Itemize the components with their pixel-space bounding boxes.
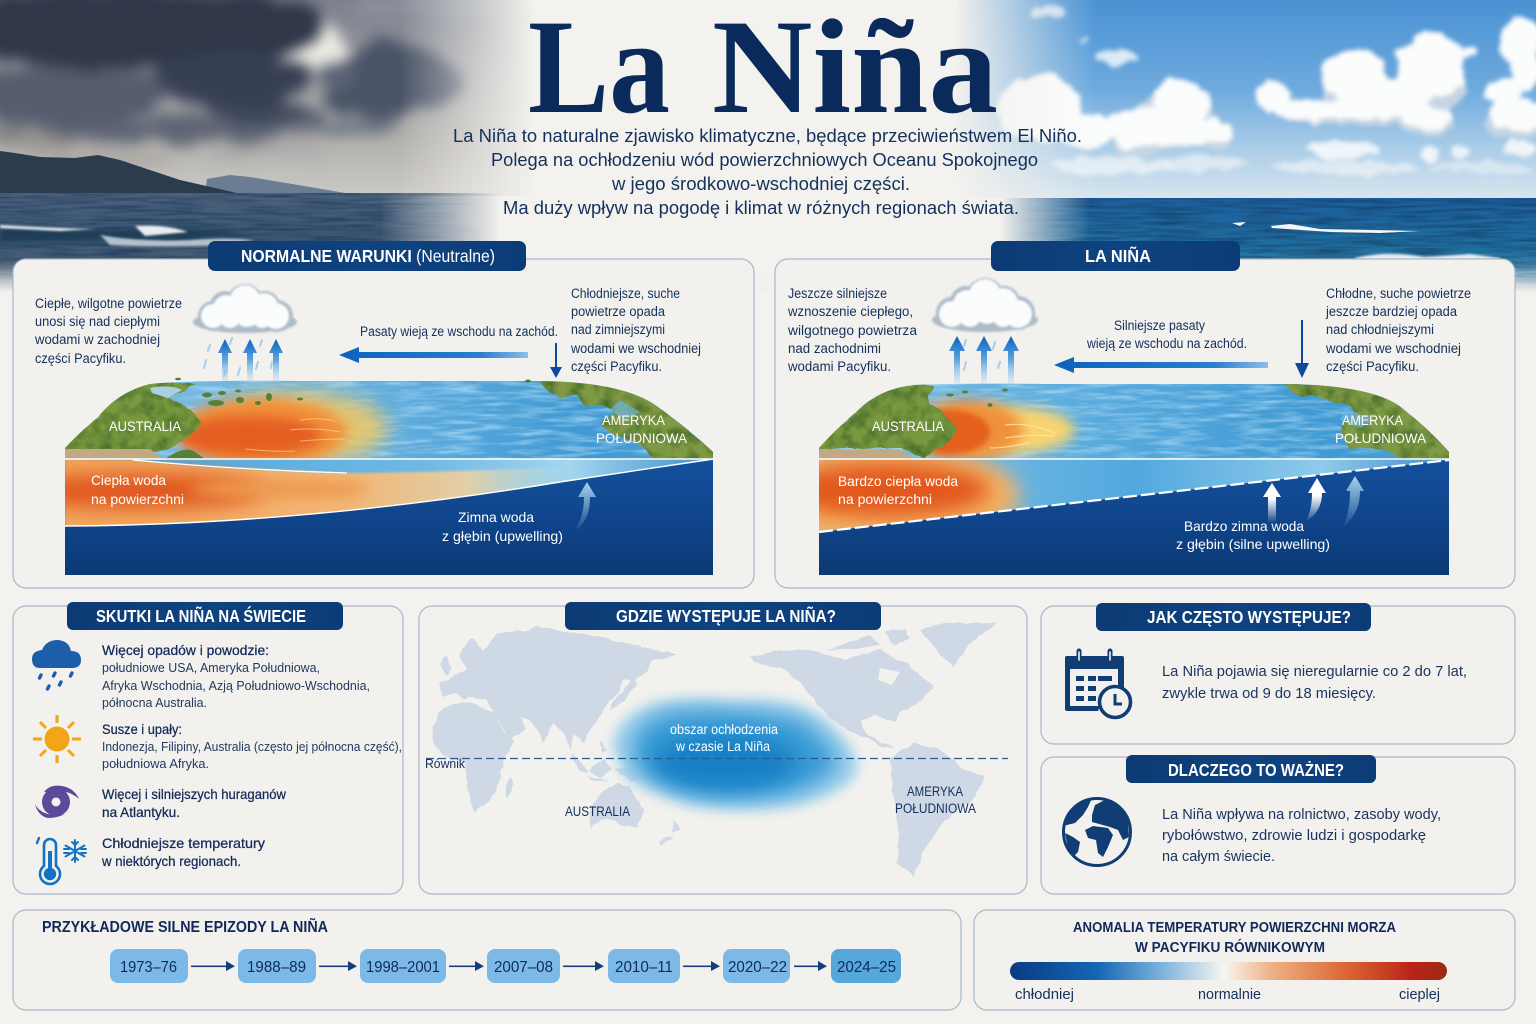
hero background: sea on the left [0, 193, 495, 290]
panel: sea surface temperature anomaly legend [974, 910, 1515, 1010]
text: hurricanes: na Atlantyku. [102, 804, 180, 820]
arrow: sinking air [1295, 320, 1309, 378]
heading: effects [67, 602, 343, 630]
label: equator: Równik [425, 756, 465, 771]
episode 2007-08 [487, 949, 560, 983]
episode 2024-25 [831, 949, 901, 983]
text: cool sinking air [1325, 286, 1471, 374]
icon: cloud with rain [932, 278, 1038, 370]
icon: thermometer and snowflake [37, 838, 86, 884]
text: rain and floods: południowe USA, Ameryka Południowa, [102, 661, 320, 675]
scale labels [1015, 987, 1440, 1003]
label: South America [596, 412, 688, 446]
episode 1973-76 [110, 949, 188, 983]
text: warm rising air [34, 296, 182, 366]
text: how often: La Niña pojawia się nieregularnie co 2 do 7 lat, [1162, 663, 1467, 680]
label: South America: POŁUDNIOWA [1335, 430, 1427, 446]
scale labels: normalnie [1198, 987, 1261, 1003]
arrow: trade winds [339, 347, 528, 363]
episode 1988-89: 1988–89 [247, 959, 306, 976]
text: how often: zwykle trwa od 9 do 18 miesięcy. [1162, 685, 1376, 702]
label: South America: AMERYKA [1342, 412, 1404, 428]
label: Australia: AUSTRALIA [872, 418, 945, 434]
arrow [563, 961, 604, 971]
label: very cold deep water [1176, 518, 1330, 552]
episode 2010-11 [608, 949, 680, 983]
intro text: w jego środkowo-wschodniej części. [611, 173, 910, 194]
hero background: stormy sky on the left [0, 0, 550, 196]
icon: globe [1063, 798, 1130, 866]
text: stronger rising air: wilgotnego powietrza [787, 323, 917, 338]
cooling area [612, 699, 858, 810]
label: Australia: AUSTRALIA [565, 804, 630, 819]
text: warm rising air: unosi się nad ciepłymi [35, 314, 160, 329]
heading: La Niña: LA NIÑA [1085, 245, 1151, 266]
label: warm surface water: na powierzchni [91, 491, 184, 507]
icon: hurricane [35, 786, 79, 818]
land: South America [1284, 384, 1452, 459]
panel: example episodes timeline [13, 910, 961, 1010]
stray islands along the horizon [175, 378, 531, 382]
panel: normal conditions [13, 241, 754, 588]
panel: La Niña conditions [750, 241, 1515, 588]
heading: normal conditions [208, 241, 526, 271]
heading: where [565, 602, 881, 630]
legend heading [1073, 920, 1396, 956]
intro text [453, 125, 1082, 218]
colour scale [1010, 962, 1447, 980]
label: warm surface water: Ciepła woda [91, 472, 166, 488]
text: cool sinking air: części Pacyfiku. [1326, 359, 1419, 374]
arrow [191, 961, 235, 971]
label: cold deep water: Zimna woda [458, 509, 534, 525]
panel: why it matters [1041, 755, 1515, 894]
text: cooler temperatures [101, 835, 265, 869]
icon: sun [33, 715, 81, 763]
heading: why it matters [1126, 755, 1376, 783]
heading: normal conditions: NORMALNE WARUNKI (Neutralne) [241, 246, 495, 266]
heading: why it matters: DLACZEGO TO WAŻNE? [1168, 760, 1344, 780]
episode 2020-22: 2020–22 [728, 959, 787, 976]
label: South America: POŁUDNIOWA [596, 430, 688, 446]
text: stronger rising air [787, 286, 917, 374]
episode 1998-2001 [360, 949, 446, 983]
label: warm surface water [91, 472, 184, 507]
label: very cold deep water: z głębin (silne upwelling) [1176, 536, 1330, 552]
text: warm rising air: wodami w zachodniej [34, 332, 160, 347]
title [528, 0, 998, 142]
icon: calendar with clock [1065, 651, 1130, 718]
text: cool sinking air: wodami we wschodniej [1325, 341, 1461, 356]
text: stronger trade winds [1086, 318, 1247, 351]
heading: where: GDZIE WYSTĘPUJE LA NIÑA? [616, 605, 836, 626]
hero background: blue sky on the right [940, 0, 1536, 198]
text: stronger rising air: Jeszcze silniejsze [788, 286, 887, 301]
text: why it matters: rybołówstwo, zdrowie ludzi i gospodarkę [1162, 827, 1426, 844]
label: very warm surface water [838, 473, 958, 507]
text: stronger trade winds: Silniejsze pasaty [1114, 318, 1205, 333]
text: warm rising air: Ciepłe, wilgotne powietrze [35, 296, 182, 311]
label: cooling area [670, 722, 778, 754]
icon: cloud with rain [193, 284, 297, 376]
panel: effects worldwide [13, 602, 403, 894]
label: South America: AMERYKA [907, 784, 963, 799]
text: droughts and heat: południowa Afryka. [102, 757, 209, 771]
heading: La Niña [991, 241, 1240, 271]
episode 1973-76: 1973–76 [120, 959, 177, 976]
heading: episodes: PRZYKŁADOWE SILNE EPIZODY LA NIÑA [42, 916, 328, 936]
text: cool sinking air: Chłodniejsze, suche [571, 286, 680, 301]
episode 2010-11: 2010–11 [615, 959, 673, 976]
panel: how often [1041, 603, 1515, 744]
text: stronger rising air: nad zachodnimi [788, 341, 881, 356]
text: warm rising air: części Pacyfiku. [35, 351, 126, 366]
scale labels: cieplej [1399, 987, 1440, 1003]
episode 2020-22 [723, 949, 790, 983]
hero background: fade to paper [0, 262, 1536, 292]
hero background: mountains [0, 151, 345, 193]
episode 2007-08: 2007–08 [494, 959, 553, 976]
text: rain and floods [102, 642, 370, 710]
text: stronger rising air: wznoszenie ciepłego, [787, 304, 913, 319]
text: how often [1162, 663, 1467, 702]
label: Australia: AUSTRALIA [109, 418, 182, 434]
icon: rain cloud [32, 640, 81, 689]
land: South America [538, 381, 716, 459]
arrow: sinking air [550, 343, 562, 378]
diagram: ocean surface map [60, 378, 716, 466]
arrow [794, 961, 827, 971]
diagram: ocean cross-section [819, 458, 1449, 575]
heading: how often: JAK CZĘSTO WYSTĘPUJE? [1147, 607, 1351, 627]
diagram: ocean surface map [815, 380, 1452, 460]
arrow: upwelling [574, 482, 596, 531]
text: cool sinking air: nad zimniejszymi [571, 322, 665, 337]
text: droughts and heat: Susze i upały: [102, 721, 182, 737]
text: cooler temperatures: Chłodniejsze temperatury [102, 835, 265, 851]
arrows: strong upwelling [1263, 476, 1364, 527]
label: South America: POŁUDNIOWA [895, 801, 976, 816]
text: why it matters: La Niña wpływa na rolnictwo, zasoby wody, [1162, 806, 1441, 823]
arrow [683, 961, 720, 971]
text: droughts and heat [102, 721, 402, 771]
arrows: rising air [218, 339, 283, 385]
intro text: La Niña to naturalne zjawisko klimatyczne, będące przeciwieństwem El Niño. [453, 125, 1082, 146]
text: cool sinking air: powietrze opada [571, 304, 665, 319]
text: cool sinking air: Chłodne, suche powietrze [1326, 286, 1471, 301]
legend heading: W PACYFIKU RÓWNIKOWYM [1135, 938, 1325, 956]
text: hurricanes [102, 786, 287, 820]
diagram: ocean cross-section [15, 459, 713, 575]
text: why it matters [1162, 806, 1441, 865]
text: cool sinking air: części Pacyfiku. [571, 359, 662, 374]
label: South America [1335, 412, 1427, 446]
text: cool sinking air: wodami we wschodniej [570, 341, 701, 356]
heading: how often [1096, 603, 1371, 631]
scale labels: chłodniej [1015, 987, 1074, 1003]
text: cool sinking air: jeszcze bardziej opada [1325, 304, 1457, 319]
text: cool sinking air: nad chłodniejszymi [1326, 322, 1434, 337]
label: cold deep water [442, 509, 563, 544]
heading: effects: SKUTKI LA NIÑA NA ŚWIECIE [96, 605, 306, 626]
episode 1988-89 [238, 949, 316, 983]
label: very warm surface water: na powierzchni [838, 491, 932, 507]
arrow [449, 961, 484, 971]
intro text: Ma duży wpływ na pogodę i klimat w różnych regionach świata. [503, 197, 1019, 218]
label: very warm surface water: Bardzo ciepła woda [838, 473, 958, 489]
label: very cold deep water: Bardzo zimna woda [1184, 518, 1304, 534]
episode 1998-2001: 1998–2001 [366, 959, 440, 976]
label: cooling area: w czasie La Niña [675, 739, 770, 754]
text: droughts and heat: Indonezja, Filipiny, Australia (często jej północna część), [102, 740, 402, 754]
label: South America [895, 784, 976, 816]
arrows: rising air [949, 336, 1019, 388]
text: rain and floods: północna Australia. [102, 696, 207, 710]
intro text: Polega na ochłodzeniu wód powierzchniowych Oceanu Spokojnego [491, 149, 1038, 170]
legend heading: ANOMALIA TEMPERATURY POWIERZCHNI MORZA [1073, 920, 1396, 936]
arrow: stronger trade winds [1054, 357, 1268, 373]
text: rain and floods: Afryka Wschodnia, Azją Południowo-Wschodnia, [102, 679, 370, 693]
label: cold deep water: z głębin (upwelling) [442, 528, 563, 544]
text: why it matters: na całym świecie. [1162, 848, 1275, 865]
arrow [319, 961, 357, 971]
text: rain and floods: Więcej opadów i powodzie: [102, 642, 269, 658]
text: trade winds: Pasaty wieją ze wschodu na zachód. [360, 324, 558, 339]
text: cool sinking air [570, 286, 701, 374]
world map [432, 623, 998, 877]
label: South America: AMERYKA [602, 412, 666, 428]
panel: where La Niña occurs [419, 602, 1027, 894]
episode 2024-25: 2024–25 [837, 959, 896, 976]
equator line [426, 758, 1008, 760]
text: stronger trade winds: wieją ze wschodu na zachód. [1086, 336, 1247, 351]
text: stronger rising air: wodami Pacyfiku. [787, 359, 891, 374]
land: Australia [815, 384, 957, 460]
label: cooling area: obszar ochłodzenia [670, 722, 778, 737]
text: cooler temperatures: w niektórych regionach. [101, 853, 241, 869]
text: hurricanes: Więcej i silniejszych huraganów [102, 786, 287, 802]
land: Australia [60, 381, 201, 460]
hero background: sea on the right [1000, 198, 1536, 300]
